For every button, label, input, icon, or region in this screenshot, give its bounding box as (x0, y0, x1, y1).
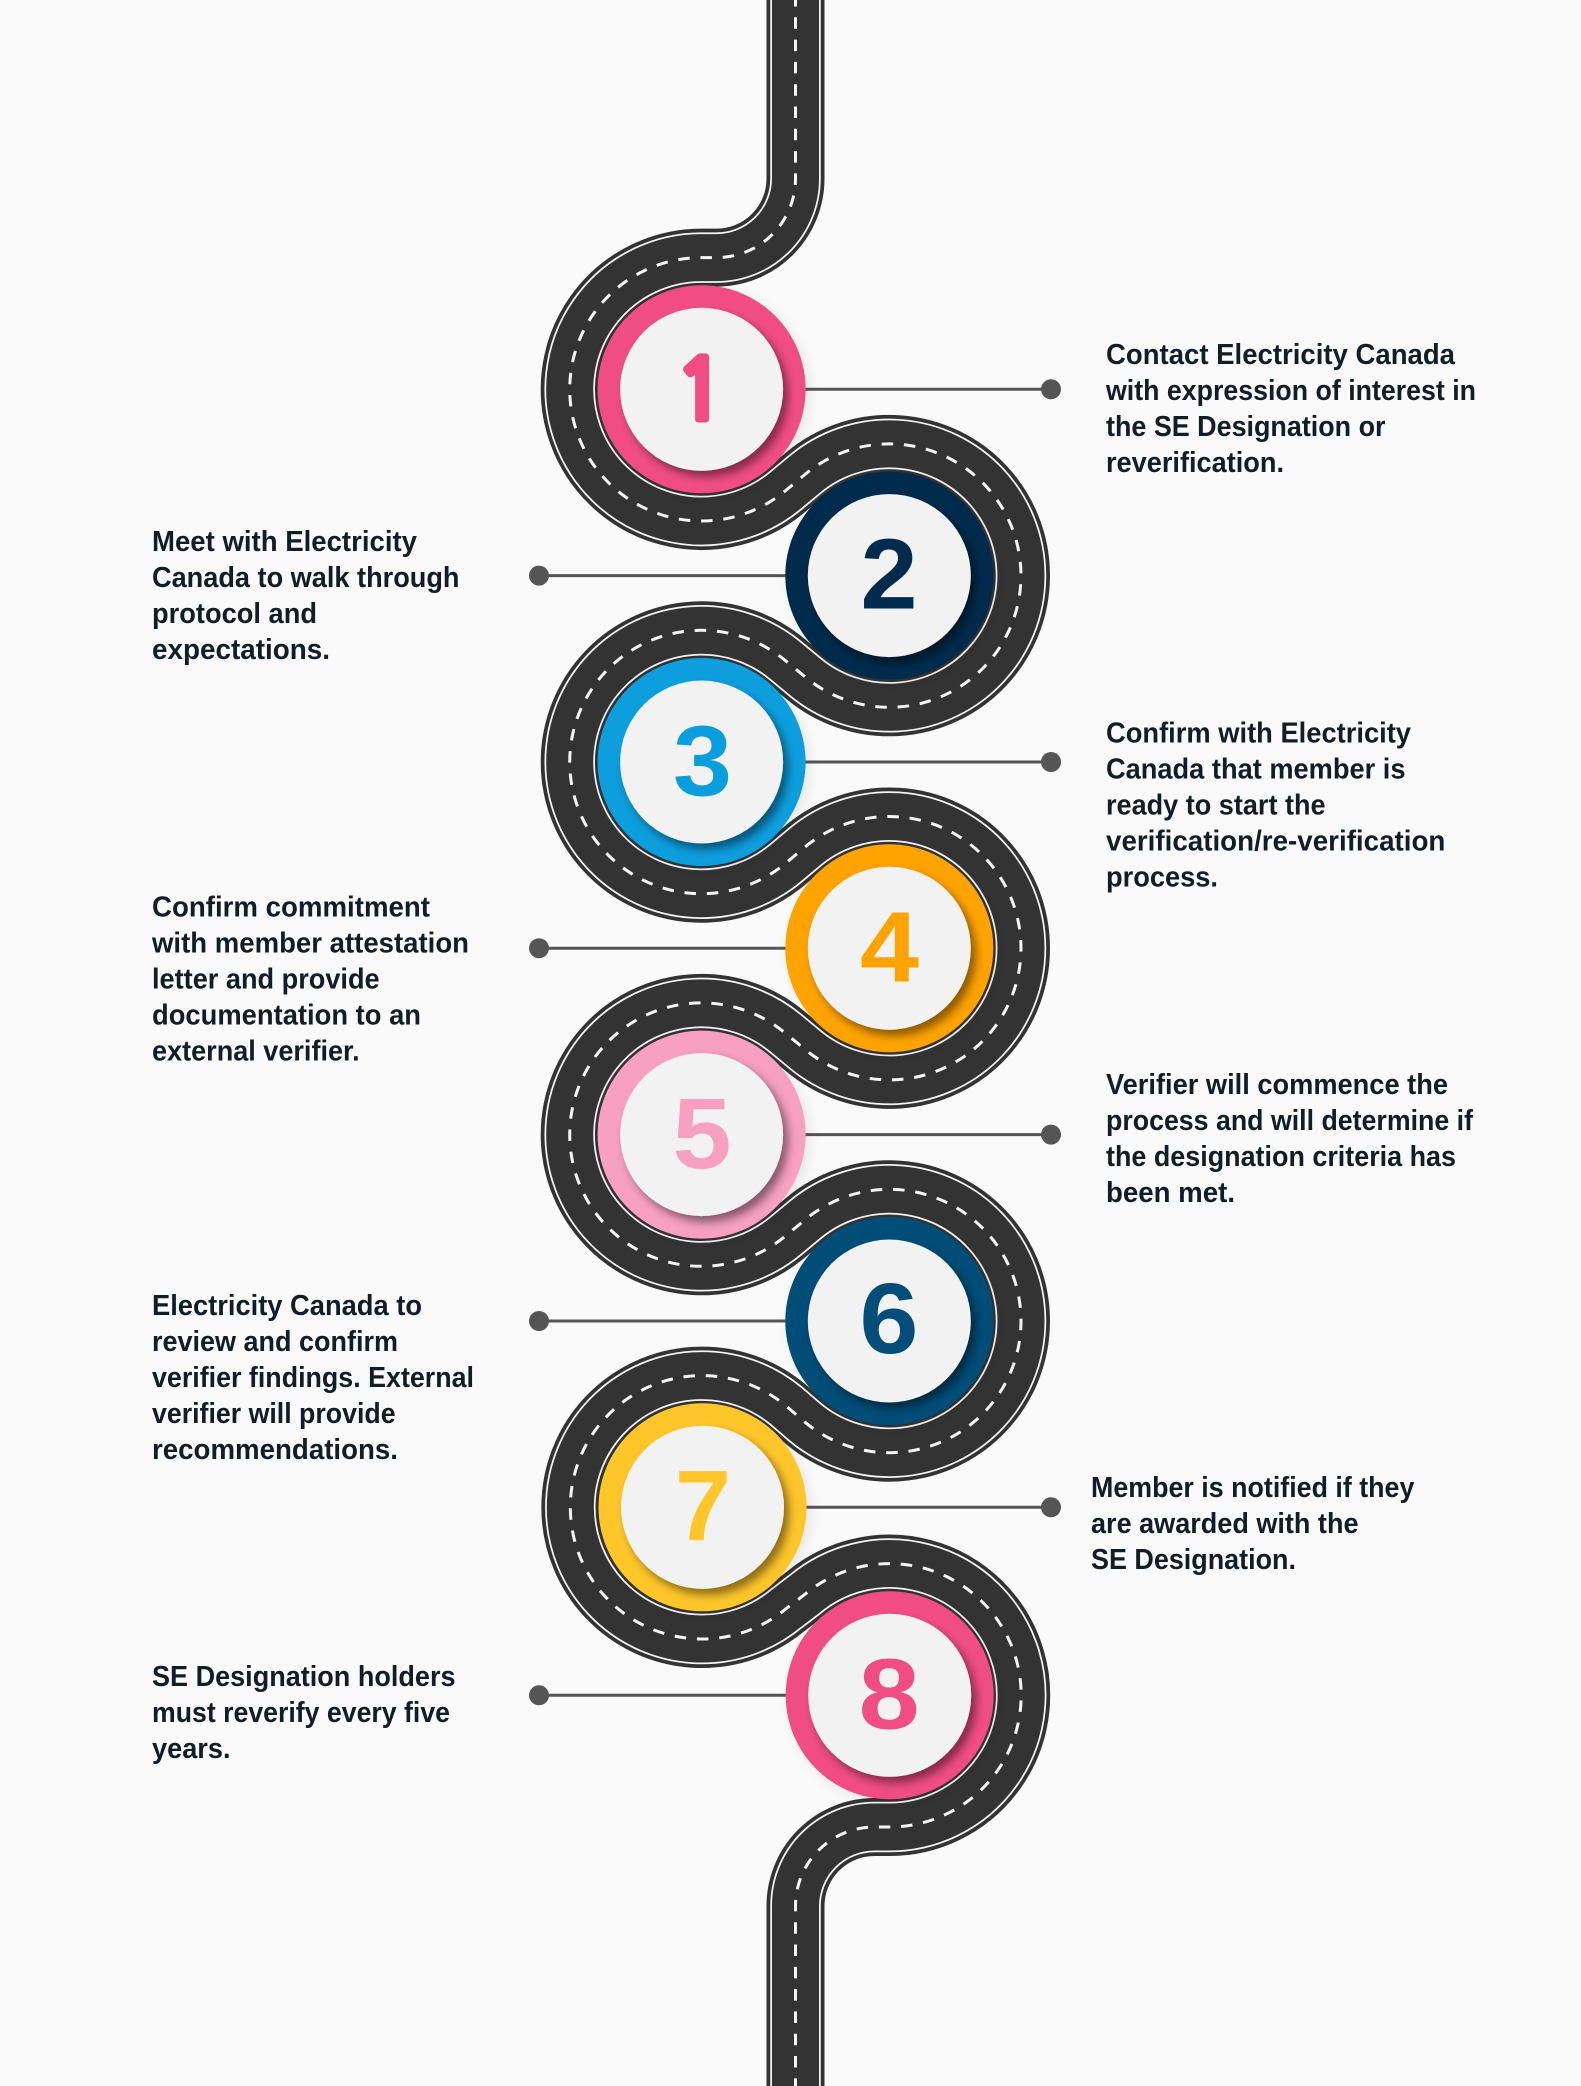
badge 5: 5 (672, 1078, 732, 1190)
badge 1 (598, 285, 806, 493)
step 8 text (152, 1661, 456, 1765)
badge 1: 1 (675, 349, 726, 433)
badge 6 (785, 1217, 993, 1425)
step 7 text (1091, 1472, 1414, 1576)
step 5 text: process and will determine if (1106, 1105, 1473, 1137)
step 2 text: protocol and (152, 598, 317, 630)
step 5 text: Verifier will commence the (1106, 1069, 1448, 1101)
step 7 text: Member is notified if they (1091, 1472, 1414, 1504)
step 5 text: been met. (1106, 1177, 1235, 1209)
winding road (570, 0, 1021, 2086)
step 4 text: Confirm commitment (152, 892, 430, 924)
badge 6: 6 (860, 1263, 918, 1375)
step 4 text: external verifier. (152, 1036, 360, 1068)
step 3 text: verification/re-verification (1106, 826, 1445, 858)
badge 3: 3 (673, 706, 732, 818)
step 6 text: Electricity Canada to (152, 1290, 422, 1322)
step 3 text: Confirm with Electricity (1106, 718, 1411, 750)
badge 7: 7 (675, 1450, 731, 1562)
step 3 text: process. (1106, 862, 1218, 894)
badge 2 (785, 472, 993, 680)
step 5 text: the designation criteria has (1106, 1141, 1456, 1173)
step 6 text: recommendations. (152, 1434, 398, 1466)
step 4 text (151, 892, 469, 1068)
step 2 text: Canada to walk through (152, 562, 460, 594)
step 2 text: Meet with Electricity (152, 526, 417, 558)
step 7 text: SE Designation. (1091, 1544, 1296, 1576)
badge 8 (786, 1591, 994, 1799)
step 6 text (152, 1290, 474, 1466)
connector 5 (790, 1125, 1061, 1145)
badge 8: 8 (859, 1638, 920, 1750)
step 3 text: Canada that member is (1106, 754, 1406, 786)
badge 7 (598, 1403, 806, 1611)
connector 1 (790, 379, 1061, 399)
step 8 text: years. (152, 1733, 230, 1765)
badge 4: 4 (860, 892, 919, 1004)
step 2 text (152, 526, 460, 666)
badge 5 (598, 1031, 806, 1239)
step 1 text (1105, 339, 1476, 479)
step 7 text: are awarded with the (1091, 1508, 1358, 1540)
step 6 text: verifier will provide (152, 1398, 396, 1430)
step 1 text: reverification. (1106, 447, 1284, 479)
connector 2 (529, 566, 800, 586)
step 2 text: expectations. (152, 634, 330, 666)
step 6 text: review and confirm (152, 1326, 398, 1358)
step 3 text (1106, 718, 1445, 894)
connector 8 (529, 1685, 800, 1705)
badge 2: 2 (860, 518, 918, 630)
step 4 text: documentation to an (152, 1000, 421, 1032)
step 8 text: SE Designation holders (152, 1661, 456, 1693)
step 4 text: with member attestation (151, 928, 469, 960)
step 8 text: must reverify every five (152, 1697, 450, 1729)
step 6 text: verifier findings. External (152, 1362, 474, 1394)
connector 7 (790, 1497, 1061, 1517)
connector 3 (790, 752, 1061, 772)
step 3 text: ready to start the (1106, 790, 1326, 822)
connector 4 (529, 938, 800, 958)
badge 3 (598, 658, 806, 866)
connector 6 (529, 1311, 800, 1331)
step 1 text: the SE Designation or (1106, 411, 1386, 443)
step 5 text (1106, 1069, 1473, 1209)
step 1 text: Contact Electricity Canada (1106, 339, 1456, 371)
step 1 text: with expression of interest in (1105, 375, 1476, 407)
badge 4 (785, 844, 993, 1052)
step 4 text: letter and provide (152, 964, 380, 996)
